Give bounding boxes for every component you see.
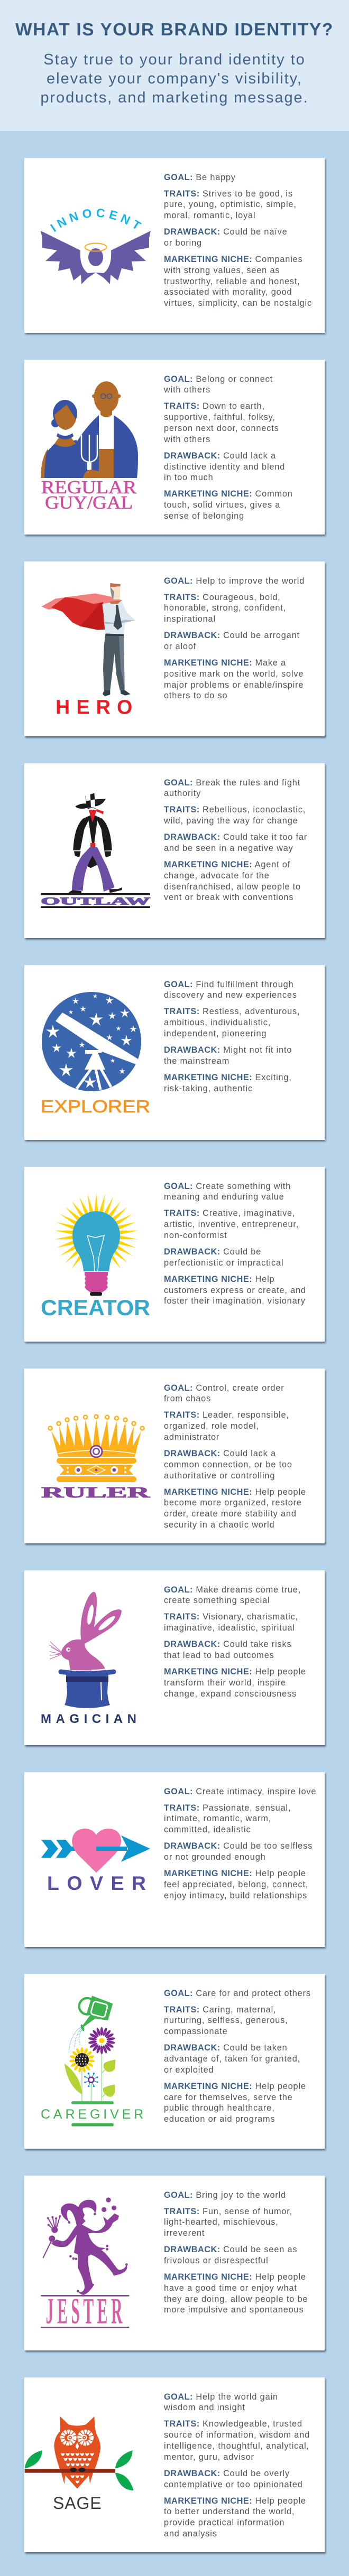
- text: hero details: DRAWBACK: Could be arrogant: [164, 631, 300, 640]
- text: jester details: light-hearted, mischievous,: [164, 2217, 279, 2227]
- logo: regular guy and gal couple: REGULAR: [41, 477, 137, 498]
- text: creator details: MARKETING NICHE: Help: [164, 1275, 274, 1284]
- text: lover details: intimate, romantic, warm,: [164, 1814, 271, 1823]
- panel: sage: [24, 2377, 325, 2552]
- text: ruler details: common connection, or be too: [164, 1460, 292, 1469]
- text: caregiver details: compassionate: [164, 2027, 228, 2036]
- text: magician details: MARKETING NICHE: Help people: [164, 1667, 306, 1676]
- text: regular guy/gal details: MARKETING NICHE: Common: [164, 489, 293, 499]
- text: jester details: frivolous or disrespectful: [164, 2256, 269, 2265]
- subtitle: Stay true to your brand identity to: [43, 51, 306, 68]
- text: ruler details: [164, 1383, 306, 1530]
- text: ruler details: become more organized, restore: [164, 1498, 302, 1507]
- text: outlaw details: wild, paving the way for change: [164, 816, 298, 826]
- text: magician details: transform their world, inspire: [164, 1678, 286, 1688]
- text: magician details: [164, 1585, 306, 1699]
- text: lover details: feel appreciated, belong, connect,: [164, 1880, 308, 1889]
- text: outlaw details: [164, 778, 307, 902]
- text: innocent details: TRAITS: Strives to be good, is: [164, 189, 293, 199]
- text: lover details: TRAITS: Passionate, sensual,: [164, 1803, 291, 1813]
- text: explorer details: GOAL: Find fulfillment through: [164, 980, 293, 989]
- text: sage details: wisdom and insight: [164, 2403, 245, 2412]
- text: magician details: imaginative, idealistic, spiritual: [164, 1623, 295, 1633]
- logo: owl on a branch: [24, 2416, 134, 2513]
- text: creator details: perfectionistic or impractical: [164, 1258, 283, 1268]
- logo: masked outlaw: [41, 793, 151, 908]
- text: creator details: TRAITS: Creative, imaginative,: [164, 1209, 295, 1218]
- text: sage details: [164, 2392, 310, 2538]
- panel: outlaw: [24, 763, 325, 938]
- logo: watering can and flowers: CAREGIVER: [41, 2107, 143, 2122]
- text: magician details: that lead to bad outcomes: [164, 1651, 274, 1660]
- text: jester details: MARKETING NICHE: Help people: [164, 2272, 306, 2282]
- text: innocent details: associated with morality, good: [164, 287, 292, 297]
- text: creator details: non-conformist: [164, 1231, 227, 1240]
- text: caregiver details: care for themselves, serve the: [164, 2093, 293, 2102]
- text: regular guy/gal details: supportive, faithful, folksy,: [164, 413, 275, 422]
- text: ruler details: MARKETING NICHE: Help people: [164, 1487, 306, 1497]
- panel: ruler: [24, 1369, 325, 1543]
- text: lover details: GOAL: Create intimacy, inspire love: [164, 1787, 316, 1796]
- text: magician details: TRAITS: Visionary, charismatic,: [164, 1612, 298, 1622]
- text: innocent details: with strong values, seen as: [164, 266, 280, 275]
- text: caregiver details: GOAL: Care for and protect others: [164, 1989, 311, 1998]
- text: outlaw details: GOAL: Break the rules and fight: [164, 778, 300, 788]
- text: caregiver details: or exploited: [164, 2065, 214, 2075]
- subtitle: [40, 51, 309, 106]
- text: ruler details: authoritative or controlling: [164, 1471, 275, 1481]
- text: magician details: create something special: [164, 1596, 270, 1605]
- text: sage details: MARKETING NICHE: Help people: [164, 2496, 306, 2506]
- logo: watering can and flowers: [41, 1996, 143, 2127]
- text: ruler details: security in a chaotic world: [164, 1520, 274, 1530]
- text: hero details: or aloof: [164, 642, 196, 651]
- text: lover details: or not grounded enough: [164, 1852, 266, 1862]
- text: magician details: change, expand consciousness: [164, 1689, 297, 1699]
- title: WHAT IS YOUR BRAND IDENTITY?: [15, 20, 334, 40]
- text: innocent details: trustworthy, reliable and honest,: [164, 277, 300, 286]
- text: jester details: irreverent: [164, 2228, 205, 2238]
- panel: regular guy/gal: [24, 360, 325, 535]
- text: innocent details: pure, young, optimistic, simple,: [164, 200, 297, 209]
- subtitle: products, and marketing message.: [40, 89, 309, 106]
- logo: caped hero: HERO: [56, 696, 132, 718]
- text: explorer details: risk-taking, authentic: [164, 1084, 253, 1093]
- logo: telescope and stars: EXPLORER: [41, 1097, 150, 1117]
- logo: heart and arrow: LOVER: [47, 1872, 146, 1894]
- text: creator details: customers express or create, and: [164, 1286, 306, 1295]
- logo: rabbit in a hat: [41, 1592, 136, 1726]
- text: regular guy/gal details: [164, 374, 293, 521]
- text: sage details: to better understand the world,: [164, 2507, 295, 2516]
- text: ruler details: TRAITS: Leader, responsible,: [164, 1410, 289, 1420]
- text: outlaw details: vent or break with conventions: [164, 893, 293, 902]
- panel: lover: [24, 1772, 325, 1947]
- logo: regular guy and gal couple: [41, 381, 138, 513]
- text: innocent details: DRAWBACK: Could be naïve: [164, 227, 288, 237]
- text: lover details: enjoy intimacy, build relationships: [164, 1891, 307, 1900]
- text: sage details: DRAWBACK: Could be overly: [164, 2469, 290, 2478]
- text: jester details: GOAL: Bring joy to the world: [164, 2190, 286, 2200]
- text: outlaw details: DRAWBACK: Could take it too far: [164, 832, 307, 842]
- logo: masked outlaw: OUTLAW: [41, 895, 150, 907]
- panel: jester: [24, 2176, 325, 2350]
- logo: caped hero: [41, 583, 135, 718]
- text: lover details: committed, idealistic: [164, 1825, 251, 1834]
- text: ruler details: DRAWBACK: Could lack a: [164, 1449, 276, 1458]
- text: magician details: DRAWBACK: Could take risks: [164, 1640, 292, 1649]
- text: regular guy/gal details: person next door, connects: [164, 424, 279, 433]
- logo: light bulb: CREATOR: [41, 1295, 150, 1320]
- text: lover details: [164, 1787, 316, 1900]
- text: ruler details: order, create more stability and: [164, 1509, 297, 1519]
- panel: magician: [24, 1570, 325, 1745]
- panel: hero: [24, 561, 325, 736]
- text: ruler details: administrator: [164, 1432, 219, 1442]
- text: hero details: inspirational: [164, 614, 216, 624]
- text: explorer details: ambitious, individualistic,: [164, 1018, 271, 1027]
- text: caregiver details: education or aid programs: [164, 2114, 275, 2124]
- text: sage details: TRAITS: Knowledgeable, trusted: [164, 2419, 302, 2429]
- text: lover details: DRAWBACK: Could be too selfless: [164, 1841, 313, 1851]
- logo: crown: [41, 1414, 151, 1501]
- text: outlaw details: TRAITS: Rebellious, iconoclastic,: [164, 805, 306, 814]
- text: outlaw details: disenfranchised, allow people to: [164, 882, 301, 892]
- text: explorer details: MARKETING NICHE: Exciting,: [164, 1073, 292, 1082]
- text: explorer details: the mainstream: [164, 1056, 229, 1066]
- text: hero details: honorable, strong, confident,: [164, 603, 286, 613]
- text: regular guy/gal details: TRAITS: Down to earth,: [164, 401, 265, 411]
- text: innocent details: moral, romantic, loyal: [164, 211, 255, 220]
- text: outlaw details: authority: [164, 789, 201, 798]
- text: lover details: MARKETING NICHE: Help people: [164, 1869, 306, 1878]
- logo: telescope and stars: [41, 992, 150, 1117]
- text: creator details: artistic, inventive, entrepreneur,: [164, 1220, 299, 1229]
- text: sage details: GOAL: Help the world gain: [164, 2392, 278, 2402]
- logo: regular guy and gal couple: GUY/GAL: [45, 492, 133, 513]
- text: caregiver details: TRAITS: Caring, maternal,: [164, 2005, 276, 2015]
- text: innocent details: virtues, simplicity, can be nostalgic: [164, 298, 312, 308]
- text: regular guy/gal details: in too much: [164, 473, 214, 482]
- text: outlaw details: MARKETING NICHE: Agent of: [164, 860, 290, 869]
- text: explorer details: TRAITS: Restless, adventurous,: [164, 1007, 300, 1016]
- text: sage details: intelligence, thoughtful, analytical,: [164, 2441, 309, 2451]
- text: outlaw details: change, advocate for the: [164, 871, 270, 880]
- logo: crown: RULER: [41, 1485, 151, 1501]
- text: hero details: TRAITS: Courageous, bold,: [164, 593, 281, 602]
- text: regular guy/gal details: touch, solid virtues, gives a: [164, 500, 280, 510]
- logo: heart and arrow: [41, 1829, 150, 1894]
- text: outlaw details: and be seen in a negative way: [164, 844, 293, 853]
- text: hero details: major problems or enable/inspire: [164, 680, 304, 690]
- text: creator details: meaning and enduring value: [164, 1192, 284, 1202]
- text: caregiver details: public through healthcare,: [164, 2103, 274, 2113]
- text: hero details: GOAL: Help to improve the world: [164, 576, 305, 586]
- text: regular guy/gal details: GOAL: Belong or connect: [164, 374, 273, 384]
- text: ruler details: organized, role model,: [164, 1421, 259, 1431]
- text: sage details: and analysis: [164, 2529, 217, 2538]
- text: hero details: positive mark on the world, solve: [164, 669, 304, 679]
- text: sage details: mentor, guru, advisor: [164, 2452, 254, 2462]
- text: sage details: source of information, wisdom and: [164, 2430, 310, 2440]
- text: innocent details: or boring: [164, 238, 202, 248]
- text: jester details: DRAWBACK: Could be seen as: [164, 2245, 297, 2254]
- text: hero details: [164, 576, 305, 700]
- panel: creator: [24, 1167, 325, 1342]
- text: regular guy/gal details: DRAWBACK: Could lack a: [164, 451, 276, 461]
- logo: innocent winged halo: [41, 209, 151, 284]
- logo: juggling jester: JESTER: [46, 2290, 126, 2331]
- text: sage details: contemplative or too opinionated: [164, 2480, 303, 2489]
- text: jester details: TRAITS: Fun, sense of humor,: [164, 2207, 292, 2216]
- text: jester details: [164, 2190, 308, 2315]
- logo: owl on a branch: SAGE: [53, 2494, 102, 2513]
- text: creator details: GOAL: Create something with: [164, 1182, 291, 1191]
- text: caregiver details: DRAWBACK: Could be taken: [164, 2043, 288, 2053]
- text: regular guy/gal details: with others: [164, 435, 210, 444]
- panel: innocent: [24, 158, 325, 333]
- text: jester details: more impulsive and spontaneous: [164, 2305, 304, 2315]
- text: explorer details: discovery and new experiences: [164, 990, 297, 1000]
- logo: rabbit in a hat: MAGICIAN: [41, 1712, 136, 1726]
- logo: juggling jester: [41, 2197, 129, 2331]
- logo: innocent winged halo: INNOCENT: [50, 209, 142, 232]
- text: explorer details: independent, pioneering: [164, 1029, 267, 1038]
- text: creator details: [164, 1182, 306, 1306]
- logo: light bulb: [41, 1193, 150, 1320]
- text: explorer details: [164, 980, 300, 1093]
- text: hero details: MARKETING NICHE: Make a: [164, 658, 286, 668]
- text: jester details: they are doing, allow people to be: [164, 2294, 308, 2304]
- text: innocent details: MARKETING NICHE: Companies: [164, 255, 303, 264]
- text: magician details: GOAL: Make dreams come true,: [164, 1585, 301, 1595]
- text: innocent details: GOAL: Be happy: [164, 173, 236, 182]
- text: caregiver details: [164, 1989, 311, 2124]
- text: caregiver details: MARKETING NICHE: Help people: [164, 2082, 306, 2091]
- text: regular guy/gal details: sense of belonging: [164, 511, 244, 521]
- text: regular guy/gal details: with others: [164, 385, 210, 395]
- header band: [0, 0, 349, 131]
- text: creator details: foster their imagination, visionary: [164, 1296, 306, 1306]
- text: ruler details: GOAL: Control, create order: [164, 1383, 284, 1393]
- subtitle: elevate your company's visibility,: [47, 70, 302, 87]
- panel: caregiver: [24, 1974, 325, 2149]
- text: ruler details: from chaos: [164, 1394, 211, 1403]
- text: innocent details: [164, 173, 312, 308]
- text: hero details: others to do so: [164, 691, 227, 700]
- panel: explorer: [24, 965, 325, 1140]
- text: sage details: provide practical information: [164, 2518, 284, 2527]
- text: explorer details: DRAWBACK: Might not fit into: [164, 1045, 292, 1055]
- text: creator details: DRAWBACK: Could be: [164, 1247, 261, 1257]
- text: caregiver details: advantage of, taken for granted,: [164, 2054, 300, 2064]
- text: jester details: have a good time or enjoy what: [164, 2283, 297, 2293]
- text: caregiver details: nurturing, selfless, generous,: [164, 2016, 288, 2025]
- text: regular guy/gal details: distinctive identity and blend: [164, 462, 285, 472]
